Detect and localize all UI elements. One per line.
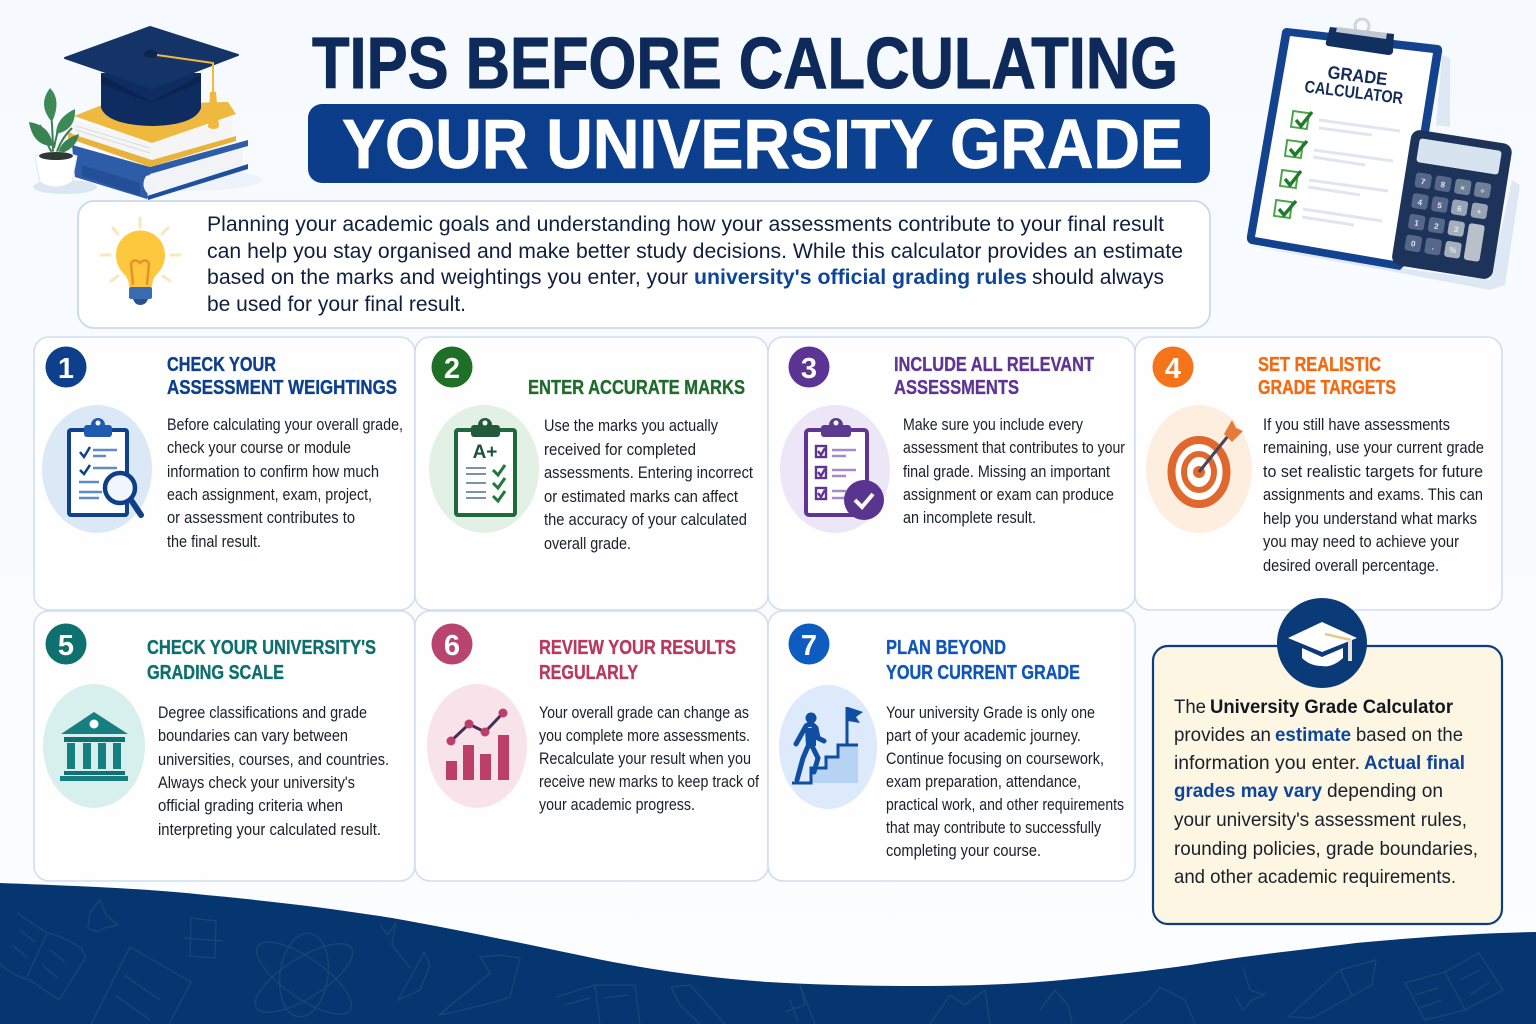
badge 4	[1152, 346, 1194, 388]
callout text: The	[1174, 696, 1206, 718]
heading 4: GRADE TARGETS	[1258, 376, 1396, 399]
heading 5	[147, 636, 376, 684]
heading 4: SET REALISTIC	[1258, 353, 1381, 376]
heading 3	[894, 353, 1094, 399]
body 4: remaining, use your current grade	[1263, 439, 1484, 457]
body 3: assignment or exam can produce	[903, 486, 1114, 504]
intro panel	[78, 201, 1210, 328]
heading 4	[1258, 353, 1396, 399]
body 2: overall grade.	[544, 535, 631, 553]
body 3: final grade. Missing an important	[903, 463, 1110, 481]
calculator: %	[1449, 245, 1457, 255]
icon: clipboard with A+	[429, 405, 539, 533]
callout text: grades may vary	[1174, 780, 1322, 802]
callout text: provides an	[1174, 724, 1271, 746]
heading 7: YOUR CURRENT GRADE	[886, 661, 1080, 684]
body 2: the accuracy of your calculated	[544, 511, 747, 529]
callout text: depending on	[1327, 780, 1443, 802]
calculator: 2	[1433, 222, 1440, 231]
yellow book	[68, 102, 236, 167]
badge 5: 5	[58, 630, 74, 662]
body 2	[544, 417, 753, 553]
body 4: assignments and exams. This can	[1263, 486, 1483, 504]
calculator: 5	[1437, 201, 1443, 210]
icon: clipboard with magnifier	[42, 405, 152, 533]
body 5: Always check your university's	[158, 774, 355, 792]
body 1: information to confirm how much	[167, 463, 379, 481]
title	[308, 24, 1210, 183]
body 4: you may need to achieve your	[1263, 533, 1459, 551]
body 7: Continue focusing on coursework,	[886, 750, 1104, 768]
body 1	[167, 416, 403, 551]
heading 2: ENTER ACCURATE MARKS	[528, 376, 745, 399]
calculator: .	[1431, 242, 1435, 252]
panel: tip 4	[1135, 337, 1502, 610]
heading 5: GRADING SCALE	[147, 661, 284, 684]
calculator: 1	[1414, 218, 1420, 228]
body 5: Degree classifications and grade	[158, 704, 367, 722]
plant	[29, 88, 79, 187]
badge 7: 7	[801, 630, 817, 662]
body 4: If you still have assessments	[1263, 416, 1450, 434]
clipboard: GRADE	[1327, 62, 1389, 89]
heading 1	[167, 353, 397, 399]
icon: clipboard with A+: A+	[473, 442, 497, 463]
heading 1: ASSESSMENT WEIGHTINGS	[167, 376, 397, 399]
body 6: receive new marks to keep track of	[539, 773, 759, 791]
clipboard: CALCULATOR	[1304, 77, 1404, 108]
body 5: universities, courses, and countries.	[158, 751, 389, 769]
panel: tip 1	[34, 337, 415, 610]
body 2: or estimated marks can affect	[544, 488, 738, 506]
body 6: Your overall grade can change as	[539, 704, 749, 722]
badge 6: 6	[444, 630, 460, 662]
callout text: rounding policies, grade boundaries,	[1174, 838, 1478, 860]
intro text: be used for your final result.	[207, 293, 466, 316]
body 5: boundaries can vary between	[158, 727, 348, 745]
badge 1	[46, 346, 86, 388]
callout text: information you enter.	[1174, 752, 1360, 774]
checklist	[1274, 111, 1400, 225]
calculator: 0	[1410, 239, 1417, 249]
cap	[65, 27, 238, 129]
callout text: estimate	[1275, 724, 1351, 746]
body 7: Your university Grade is only one	[886, 704, 1095, 722]
body 3: an incomplete result.	[903, 509, 1036, 527]
body 6: Recalculate your result when you	[539, 750, 751, 768]
callout text: University Grade Calculator	[1210, 696, 1453, 718]
body 4: to set realistic targets for future	[1263, 463, 1483, 481]
body 5: interpreting your calculated result.	[158, 821, 381, 839]
body 1: check your course or module	[167, 439, 351, 457]
intro text: should always	[1032, 266, 1164, 289]
footer wave	[0, 883, 1536, 1024]
body 5: official grading criteria when	[158, 797, 343, 815]
heading 7: PLAN BEYOND	[886, 636, 1006, 659]
heading 3: ASSESSMENTS	[894, 376, 1019, 399]
title: TIPS BEFORE CALCULATING	[312, 24, 1178, 104]
badge 2: 2	[444, 353, 460, 385]
icon: graduation cap badge	[1277, 598, 1367, 688]
badge 5	[46, 624, 86, 664]
callout text: and other academic requirements.	[1174, 866, 1456, 888]
body 5	[158, 704, 389, 839]
body 1: or assessment contributes to	[167, 509, 355, 527]
calculator: 8	[1440, 180, 1446, 190]
calculator: 4	[1417, 198, 1423, 207]
heading 1: CHECK YOUR	[167, 353, 276, 376]
body 7: part of your academic journey.	[886, 727, 1081, 745]
body 2: received for completed	[544, 441, 696, 459]
calculator	[1391, 129, 1513, 280]
badge 4: 4	[1165, 353, 1181, 385]
title banner: YOUR UNIVERSITY GRADE	[342, 105, 1183, 183]
body 4: help you understand what marks	[1263, 510, 1477, 528]
badge 1: 1	[58, 353, 74, 385]
calculator: ×	[1460, 183, 1466, 193]
body 7: exam preparation, attendance,	[886, 773, 1081, 791]
body 6	[539, 704, 759, 814]
body 1: each assignment, exam, project,	[167, 486, 372, 504]
panel: tip 5	[34, 611, 415, 881]
body 7: completing your course.	[886, 842, 1041, 860]
body 2: assessments. Entering incorrect	[544, 464, 753, 482]
body 3	[903, 416, 1125, 527]
heading 7	[886, 636, 1080, 684]
calculator: 6	[1456, 204, 1463, 214]
callout text: Actual final	[1364, 752, 1465, 774]
panel: tip 6	[415, 611, 768, 881]
body 6: your academic progress.	[539, 796, 695, 814]
panel: tip 3	[768, 337, 1135, 610]
heading 5: CHECK YOUR UNIVERSITY'S	[147, 636, 376, 659]
illustration: graduation cap on books	[29, 27, 262, 200]
body 4	[1263, 416, 1484, 575]
body 4: desired overall percentage.	[1263, 557, 1439, 575]
icon: rising chart	[427, 684, 527, 808]
badge 3	[788, 346, 830, 388]
body 1: the final result.	[167, 533, 261, 551]
heading 6: REGULARLY	[539, 661, 638, 684]
icon: climbing stairs to flag	[779, 685, 877, 809]
panel: tip 2	[415, 337, 768, 610]
body 3: Make sure you include every	[903, 416, 1084, 434]
body 6: you complete more assessments.	[539, 727, 750, 745]
badge 2	[432, 346, 472, 388]
icon: target with arrow	[1146, 405, 1252, 533]
body 3: assessment that contributes to your	[903, 439, 1125, 457]
badge 3: 3	[801, 353, 817, 385]
icon: checklist with tick	[780, 405, 890, 533]
calculator: 3	[1453, 225, 1460, 234]
callout text: based on the	[1356, 724, 1463, 746]
panel: tip 7	[768, 611, 1135, 881]
badge 7	[788, 624, 830, 664]
illustration: clipboard and calculator	[1247, 19, 1520, 290]
calculator: ÷	[1480, 186, 1486, 196]
intro text: can help you stay organised and make better study decisions. While this calculator provides an estimate	[207, 240, 1183, 263]
callout text: your university's assessment rules,	[1174, 809, 1467, 831]
intro text: Planning your academic goals and understanding how your assessments contribute to your final result	[207, 213, 1164, 236]
heading 6	[539, 636, 736, 684]
badge 6	[432, 624, 472, 664]
intro text: university's official grading rules	[694, 266, 1027, 289]
intro text: based on the marks and weightings you enter, your	[207, 266, 688, 289]
calculator: +	[1476, 207, 1482, 217]
callout text	[1174, 696, 1478, 888]
clipboard	[1247, 19, 1442, 270]
body 7	[886, 704, 1124, 860]
blue book	[72, 140, 248, 200]
body 7: that may contribute to successfully	[886, 819, 1102, 837]
icon: light bulb	[101, 218, 180, 305]
footer doodles	[0, 900, 1503, 1024]
heading 3: INCLUDE ALL RELEVANT	[894, 353, 1094, 376]
body 2: Use the marks you actually	[544, 417, 719, 435]
body 1: Before calculating your overall grade,	[167, 416, 403, 434]
body 7: practical work, and other requirements	[886, 796, 1124, 814]
calculator: 7	[1420, 177, 1427, 187]
intro text	[207, 213, 1183, 316]
heading 6: REVIEW YOUR RESULTS	[539, 636, 736, 659]
icon: university building	[43, 684, 145, 808]
callout: estimate note	[1153, 598, 1502, 924]
